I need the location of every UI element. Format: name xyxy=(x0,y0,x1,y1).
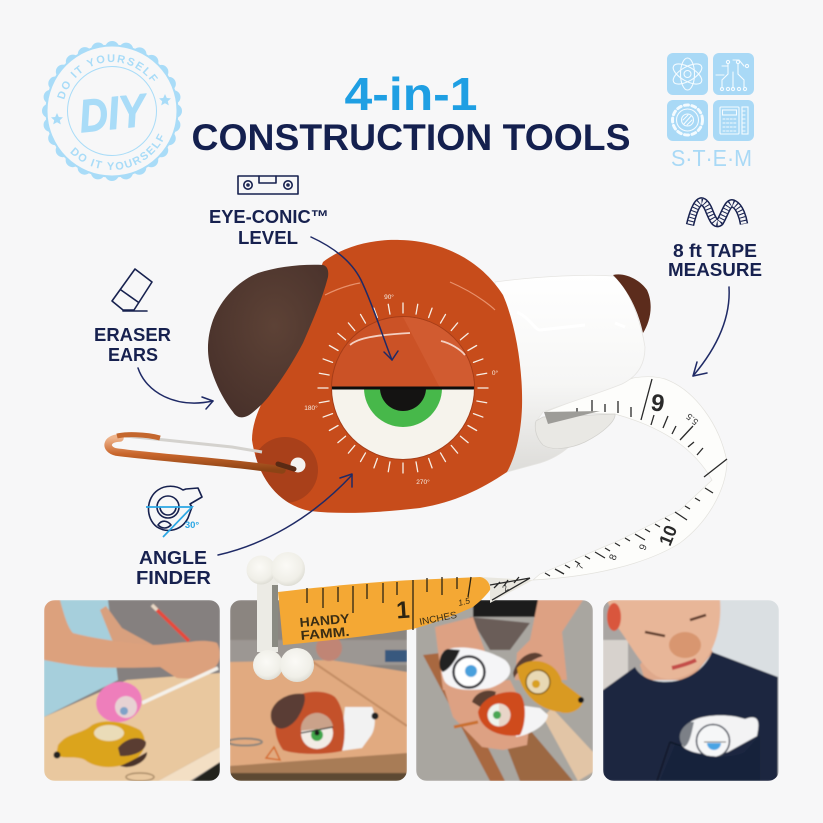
yellow tape end xyxy=(278,577,490,645)
label: tape measure: MEASURE xyxy=(668,259,762,280)
label: eye-conic level: LEVEL xyxy=(238,227,298,248)
tape blade: 8 xyxy=(608,552,620,562)
title: CONSTRUCTION TOOLS xyxy=(192,117,630,158)
DIY badge xyxy=(42,41,182,181)
icon: angle finder: 30° xyxy=(185,520,199,531)
angle dial ticks xyxy=(318,303,488,473)
title xyxy=(192,68,630,158)
tape blade: 9 xyxy=(649,389,666,418)
STEM badge: S·T·E·M xyxy=(671,145,752,171)
arrow: level xyxy=(311,237,398,360)
dial degree labels xyxy=(304,293,499,486)
label: angle finder: ANGLE xyxy=(139,547,207,568)
DIY badge: DIY xyxy=(77,83,151,142)
dial degree labels: 0° xyxy=(492,369,499,377)
DIY badge: DO IT YOURSELF xyxy=(70,134,163,170)
lower jaw xyxy=(535,414,615,449)
label: tape measure xyxy=(668,240,762,280)
eye level xyxy=(330,316,476,460)
photo: child measuring on wood xyxy=(44,600,220,781)
tape blade: 2 xyxy=(500,583,510,594)
label: eye-conic level: EYE-CONIC™ xyxy=(209,206,329,227)
dial degree labels: 90° xyxy=(384,293,394,301)
title: 4-in-1 xyxy=(344,68,478,120)
DIY badge: DO IT YOURSELF xyxy=(57,54,158,100)
photo: tape measure on plank xyxy=(228,600,407,781)
orange shell xyxy=(252,240,522,513)
label: angle finder: FINDER xyxy=(136,567,211,588)
keyring hole xyxy=(290,458,306,472)
label: eraser ears: ERASER xyxy=(94,324,171,345)
photo: boy with tool in pocket xyxy=(603,600,779,781)
STEM badge xyxy=(667,53,754,171)
label: eye-conic level xyxy=(209,206,329,248)
carabiner xyxy=(108,435,294,470)
icon: tape measure xyxy=(690,201,744,225)
hole recess xyxy=(252,282,495,503)
photo: hands holding three tools xyxy=(416,600,593,781)
yellow tape end: 1.5 xyxy=(457,595,471,608)
label: eraser ears: EARS xyxy=(108,344,158,365)
icon: spirit level xyxy=(238,176,298,194)
bone hook xyxy=(246,552,314,682)
arrow: tape measure xyxy=(693,287,729,376)
arrow: eraser ears xyxy=(138,368,213,409)
label: tape measure: 8 ft TAPE xyxy=(673,240,757,261)
snout xyxy=(495,275,645,472)
eraser ear xyxy=(208,265,328,417)
tape blade: 9 xyxy=(638,542,650,552)
label: eraser ears xyxy=(94,324,171,365)
icon: angle finder xyxy=(146,486,202,537)
tape blade xyxy=(480,377,727,603)
yellow tape end: 1 xyxy=(395,597,411,624)
dial degree labels: 180° xyxy=(304,404,318,412)
label: angle finder xyxy=(136,547,211,588)
arrow: angle finder xyxy=(218,474,352,555)
nose xyxy=(613,274,651,333)
yellow tape end: FAMM. xyxy=(300,624,350,643)
product body xyxy=(108,240,727,603)
yellow tape end: HANDY xyxy=(299,611,350,630)
tape blade: 7 xyxy=(575,562,586,571)
tape blade: 5.5 xyxy=(684,411,700,427)
icon: eraser xyxy=(112,269,152,311)
dial degree labels: 270° xyxy=(416,478,430,486)
yellow tape end: INCHES xyxy=(418,610,458,628)
tape blade: 10 xyxy=(655,522,681,548)
